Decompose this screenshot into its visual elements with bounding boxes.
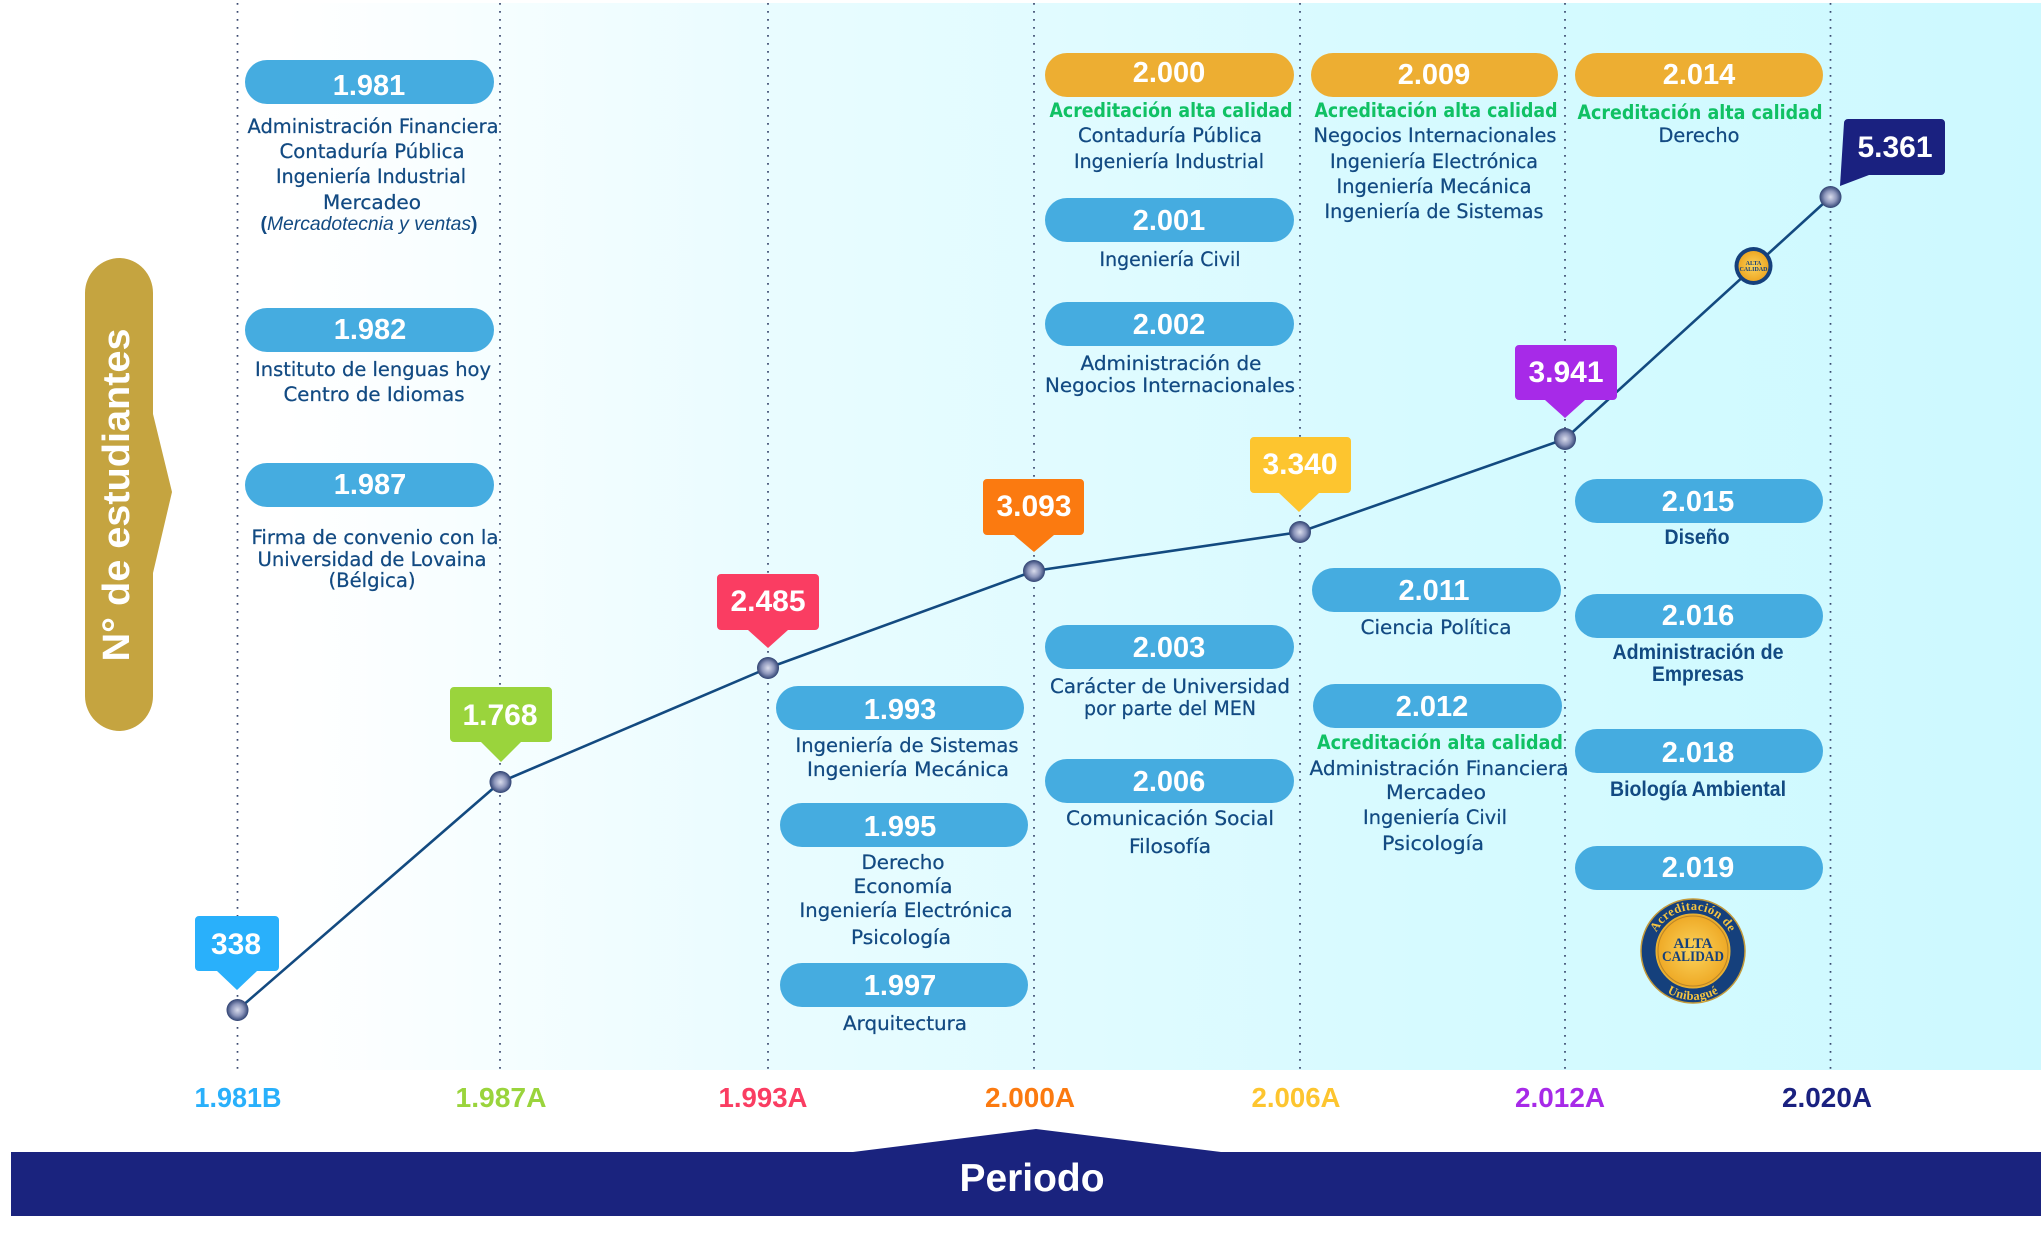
icon: small quality badge on line: CALIDAD [1739, 267, 1768, 273]
panel: 1982: 1.982 [334, 314, 406, 346]
panel: 2009: Acreditación alta calidad [1314, 99, 1558, 122]
panel: 2003: 2.003 [1133, 632, 1205, 664]
icon: alta calidad seal [1640, 898, 1746, 1004]
panel: 1995: Economía [854, 875, 952, 898]
panel: 2018: Biología Ambiental [1610, 778, 1786, 801]
panel: 1987 [245, 463, 498, 592]
x axis labels: 2.020A [1782, 1082, 1872, 1113]
x axis labels: 2.006A [1252, 1082, 1340, 1113]
panel: 2001 [1045, 198, 1294, 271]
panel: 2009: Ingeniería de Sistemas [1324, 200, 1544, 223]
panel: 2014: Acreditación alta calidad [1578, 101, 1822, 124]
panel: 1997: Arquitectura [843, 1012, 967, 1035]
panel: 2012: Ingeniería Civil [1363, 806, 1507, 829]
line chart: student growth [226, 186, 1842, 1021]
panel: 2009: Ingeniería Electrónica [1330, 150, 1538, 173]
panel: 2012: Acreditación alta calidad [1317, 731, 1563, 754]
x axis arrow: Periodo: Periodo [960, 1157, 1104, 1200]
panel: 2014: Derecho [1658, 124, 1740, 147]
panel: 2009 [1311, 53, 1558, 223]
panel: 1982 [245, 308, 494, 406]
panel: 2009: Negocios Internacionales [1314, 124, 1556, 147]
icon: small quality badge on line: ALTA [1746, 261, 1762, 267]
panel: 2003 [1045, 625, 1294, 720]
icon: alta calidad seal: CALIDAD [1662, 949, 1724, 965]
panel: 2001: Ingeniería Civil [1100, 248, 1240, 271]
panel: 2014: 2.014 [1663, 59, 1735, 91]
callout: 2.485 [717, 574, 819, 648]
panel: 2012: 2.012 [1396, 691, 1468, 723]
panel: 1995: Psicología [851, 926, 951, 949]
callout: 3.340: 3.340 [1262, 448, 1338, 481]
x axis labels: 1.981B [194, 1082, 282, 1113]
panel: 2016 [1575, 594, 1823, 686]
panel: 2011: Ciencia Política [1360, 616, 1512, 639]
panel: 2002 [1045, 302, 1295, 397]
icon: alta calidad seal: Acreditación de [1651, 902, 1734, 932]
callout: 3.093 [983, 479, 1084, 552]
panel: 2006: 2.006 [1133, 766, 1205, 798]
panel: 1982: Instituto de lenguas hoy [255, 358, 491, 381]
panel: 2012: Administración Financiera [1310, 757, 1568, 780]
panel: 1995: Derecho [862, 851, 944, 874]
x axis labels: 1.993A [718, 1082, 808, 1113]
panel: 1995 [780, 803, 1028, 949]
panel: 2006: Filosofía [1129, 835, 1211, 858]
panel: 2000 [1045, 53, 1294, 173]
panel: 1987: Firma de convenio con la [252, 526, 498, 549]
x axis labels: 2.012A [1515, 1082, 1605, 1113]
callout: 5.361: 5.361 [1857, 131, 1933, 164]
panel: 2018: 2.018 [1662, 737, 1734, 769]
panel: 1993: Ingeniería Mecánica [807, 758, 1009, 781]
panel: 2002: Administración de [1080, 352, 1262, 375]
callout: 5.361 [1840, 119, 1945, 186]
callout: 1.768 [450, 687, 552, 762]
panel: 2019 [1575, 846, 1823, 890]
panel: 1993: 1.993 [864, 694, 936, 726]
icon: small quality badge on line [1734, 247, 1772, 285]
callout: 1.768: 1.768 [462, 699, 538, 732]
panel: 2011 [1312, 568, 1561, 639]
panel: 2001: 2.001 [1133, 205, 1205, 237]
panel: 1981: Administración Financiera [248, 115, 498, 138]
panel: 1993 [776, 686, 1024, 781]
panel: 1987: 1.987 [334, 469, 406, 501]
panel: 1993: Ingeniería de Sistemas [796, 734, 1018, 757]
x axis labels [194, 1082, 1872, 1113]
panel: 1982: Centro de Idiomas [284, 383, 464, 406]
panel: 2003: por parte del MEN [1084, 697, 1256, 720]
callout: 338: 338 [211, 928, 261, 961]
x axis labels: 1.987A [456, 1082, 546, 1113]
panel: 2019: 2.019 [1662, 852, 1734, 884]
panel: 2000: Acreditación alta calidad [1050, 99, 1292, 122]
panel: 2000: Ingeniería Industrial [1074, 150, 1264, 173]
panel: 2000: Contaduría Pública [1078, 124, 1262, 147]
panel: 2016: Empresas [1652, 663, 1744, 686]
panel: 2000: 2.000 [1133, 57, 1205, 89]
callout: 3.941: 3.941 [1528, 356, 1604, 389]
panel: 1997: 1.997 [864, 970, 936, 1002]
panel: 2002: Negocios Internacionales [1045, 374, 1295, 397]
callout: 3.340 [1250, 437, 1351, 512]
panel: 2016: Administración de [1612, 641, 1784, 664]
callout: 3.941 [1515, 345, 1617, 418]
panel: 1995: 1.995 [864, 811, 936, 843]
panel: 1987: Universidad de Lovaina [258, 548, 486, 571]
period grid lines [238, 3, 1830, 1072]
callout: 2.485: 2.485 [730, 585, 806, 618]
panel: 1981 [245, 60, 498, 235]
y axis arrow: N° de estudiantes [85, 258, 172, 731]
panel: 2003: Carácter de Universidad [1050, 675, 1290, 698]
panel: 1997 [780, 963, 1028, 1035]
panel: 2009: 2.009 [1398, 59, 1470, 91]
panel: 2015 [1575, 479, 1823, 549]
icon: alta calidad seal: Unibagué [1669, 986, 1718, 1002]
panel: 1981: Ingeniería Industrial [276, 165, 466, 188]
panel: 1995: Ingeniería Electrónica [800, 899, 1012, 922]
panel: 2012 [1310, 684, 1568, 855]
panel: 1981: Contaduría Pública [280, 140, 464, 163]
y axis arrow: N° de estudiantes: N° de estudiantes [96, 328, 138, 662]
panel: 2006 [1045, 759, 1294, 858]
panel: 2018 [1575, 729, 1823, 801]
panel: 2009: Ingeniería Mecánica [1336, 175, 1532, 198]
panel: 1987: (Bélgica) [328, 569, 416, 592]
panel: 2011: 2.011 [1399, 575, 1469, 607]
panel: 2015: Diseño [1664, 526, 1730, 549]
panel: 1981: 1.981 [333, 70, 405, 102]
icon: alta calidad seal: ALTA [1673, 936, 1713, 952]
panel: 2012: Mercadeo [1386, 781, 1486, 804]
panel: 2002: 2.002 [1133, 309, 1205, 341]
callout: 338 [195, 916, 279, 990]
panel: 2016: 2.016 [1662, 600, 1734, 632]
x axis labels: 2.000A [985, 1082, 1075, 1113]
callout: 3.093: 3.093 [996, 490, 1072, 523]
panel: 2006: Comunicación Social [1066, 807, 1274, 830]
panel: 1981: (Mercadotecnia y ventas) [260, 213, 478, 235]
panel: 2014 [1575, 53, 1823, 147]
panel: 2015: 2.015 [1662, 486, 1734, 518]
panel: 2012: Psicología [1382, 832, 1484, 855]
panel: 1981: Mercadeo [323, 191, 421, 214]
x axis arrow: Periodo [11, 1129, 2041, 1216]
